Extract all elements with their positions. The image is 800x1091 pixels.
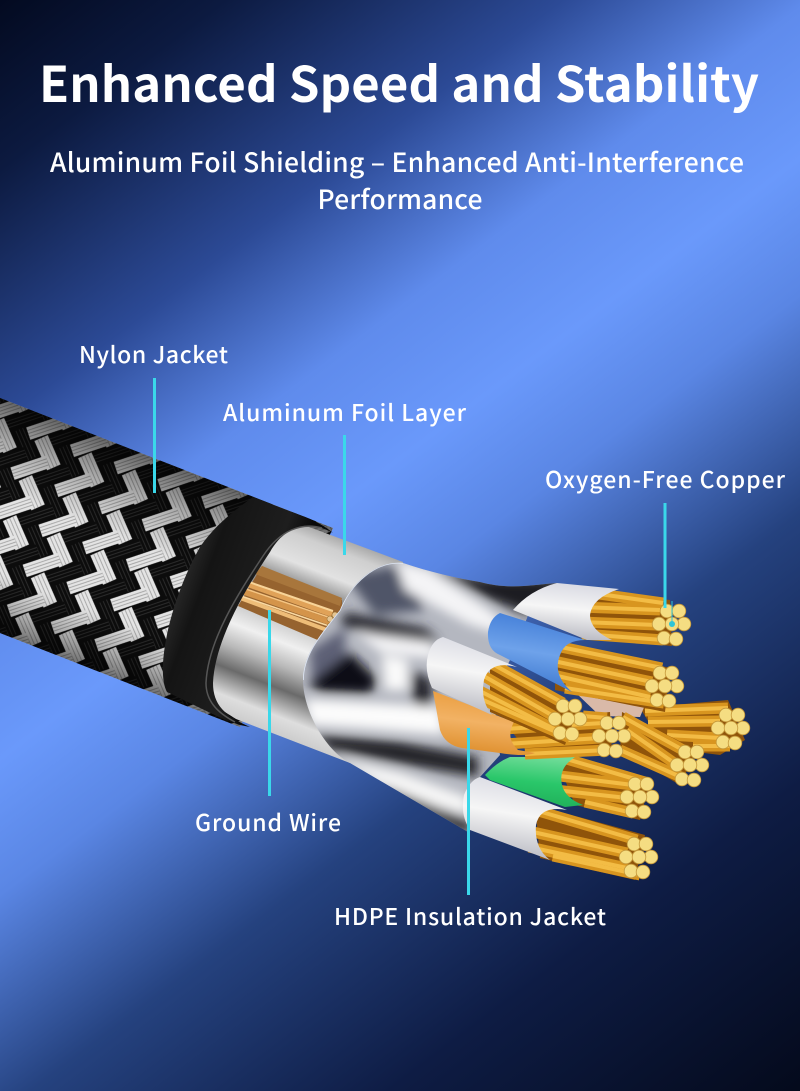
- nylon braided jacket: [0, 398, 333, 727]
- wire 4: orange sleeve: [433, 691, 631, 758]
- callout: oxygen-free copper: [545, 461, 786, 627]
- wire 7: green sleeve: [485, 755, 659, 820]
- callout: HDPE insulation jacket: [334, 728, 606, 932]
- copper foil pair: [575, 690, 645, 717]
- wire 6: centre bundle: [620, 712, 709, 787]
- ground wire: [238, 566, 342, 641]
- wire 8: white sleeve: [463, 777, 658, 880]
- wire 2: blue sleeve: [488, 613, 684, 712]
- foil wrap: [303, 562, 556, 832]
- cable illustration: [0, 398, 750, 880]
- wire bundle: back right: [640, 700, 750, 755]
- wire 1: white sleeve: [513, 583, 691, 646]
- callout: aluminum foil layer: [223, 394, 467, 555]
- subtitle: [50, 141, 744, 217]
- callout: oxygen-free copper: Oxygen-Free Copper: [545, 461, 786, 495]
- callout: nylon jacket: [79, 336, 228, 493]
- title: Enhanced Speed and Stability: [39, 46, 759, 117]
- aluminum tube: [190, 505, 420, 763]
- subtitle: Performance: [318, 178, 482, 217]
- callout: nylon jacket: Nylon Jacket: [79, 336, 228, 370]
- black collar: [163, 497, 333, 727]
- subtitle: Aluminum Foil Shielding – Enhanced Anti-Interference: [50, 141, 744, 180]
- wire 3: white sleeve: [427, 637, 587, 745]
- callout: ground wire: [195, 610, 341, 838]
- callout: ground wire: Ground Wire: [195, 804, 341, 838]
- callout: aluminum foil layer: Aluminum Foil Layer: [223, 394, 467, 428]
- callout: HDPE insulation jacket: HDPE Insulation Jacket: [334, 898, 606, 932]
